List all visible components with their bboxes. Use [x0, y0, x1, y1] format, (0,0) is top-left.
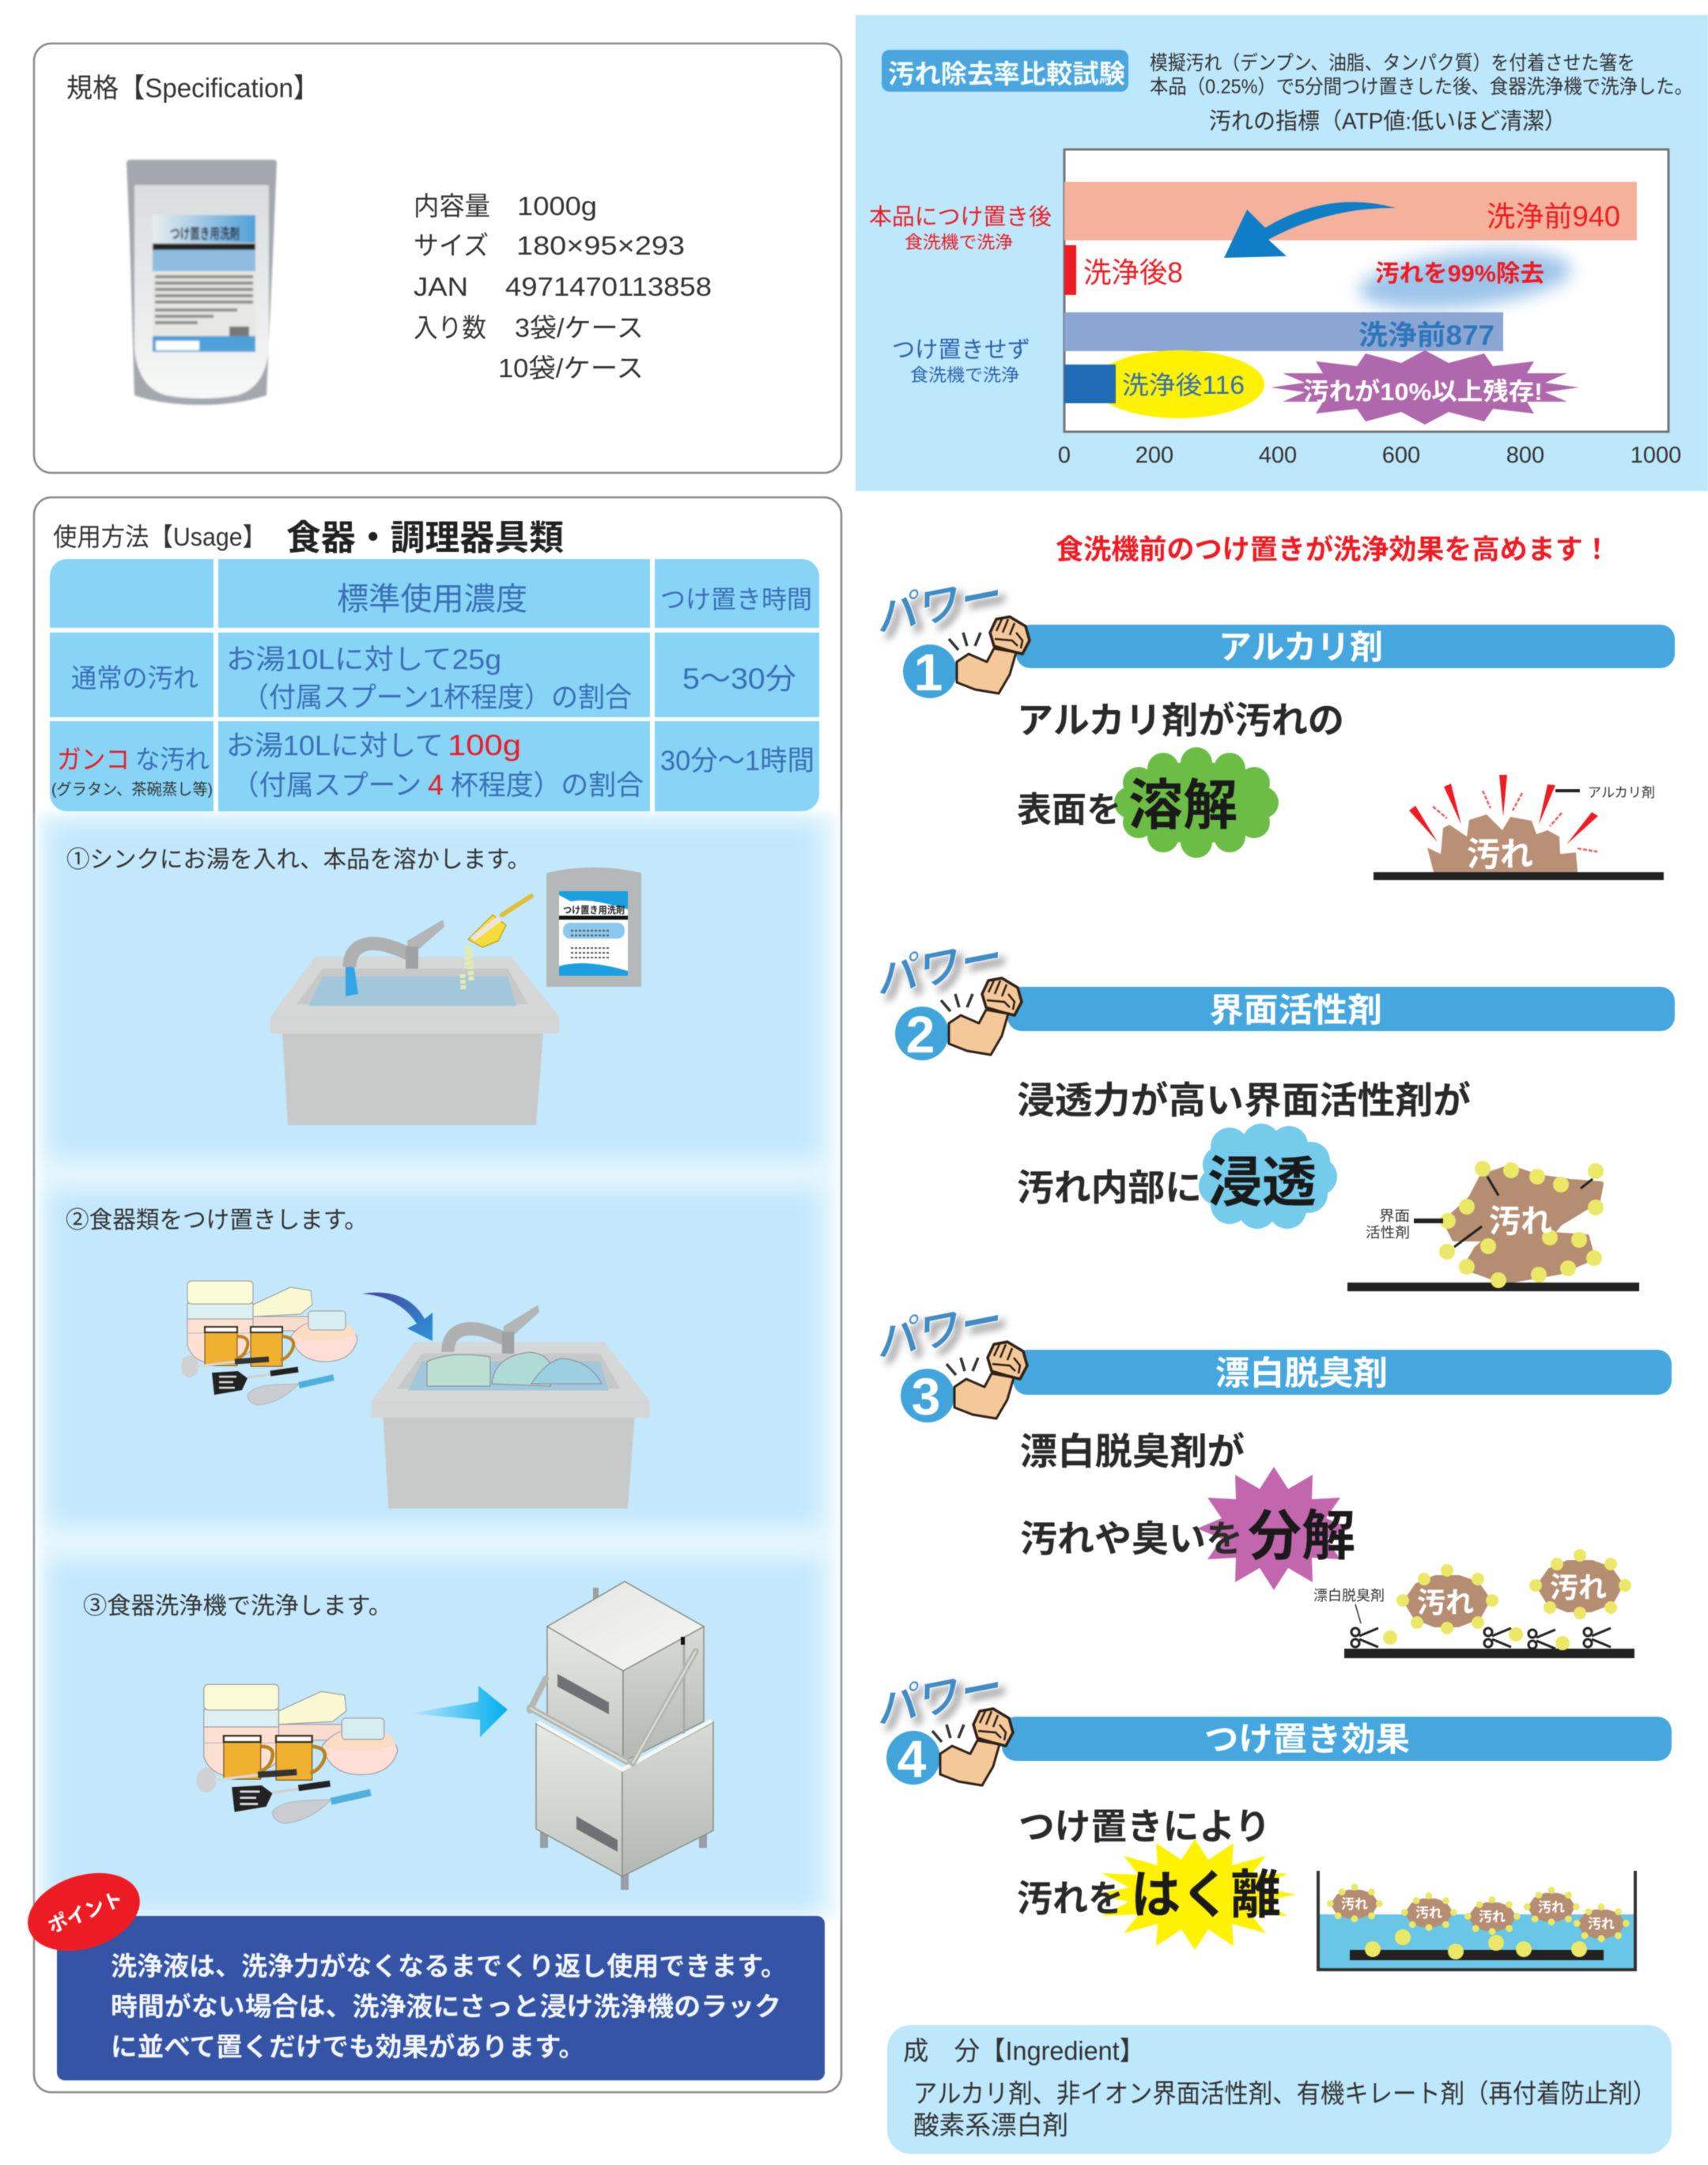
diagram: alkali attacks dirt: 汚れ: [1467, 836, 1533, 873]
badge: number 2: [895, 1005, 949, 1064]
icon: yellow scoop: [468, 896, 531, 947]
badge: point: [17, 1860, 150, 1964]
diagram: surfactant penetrates dirt: [1347, 1161, 1639, 1291]
bar: soaked after wash 8: [1064, 245, 1183, 295]
label: power: パワー: [878, 1294, 1003, 1367]
diagram: bleach breaks down dirt: [1313, 1549, 1634, 1658]
axis label: soaked: 本品につけ置き後: [869, 204, 1052, 230]
chart title: 汚れの指標（ATP値:低いほど清潔）: [1209, 108, 1566, 134]
step 3: wash in dishwasher: [83, 1581, 713, 1890]
heading: usage: 使用方法【Usage】: [53, 523, 266, 551]
text: specification details: 入り数: [414, 313, 486, 342]
text: specification details: 内容量: [414, 191, 490, 221]
diagram: dirt lifted off in tank: 汚れ: [1479, 1910, 1506, 1925]
table: concentration and soak time: （付属スプーン: [232, 770, 421, 801]
bar: not soaked before wash 877: 洗浄前877: [1358, 320, 1494, 351]
heading chip: comparison test: [882, 50, 1128, 92]
callout: point note: [57, 1916, 825, 2080]
icon: sink with dishes: [372, 1305, 650, 1509]
text: step 3: ③食器洗浄機で洗浄します。: [83, 1593, 392, 1619]
text: specification details: サイズ: [414, 231, 489, 260]
callout: decompose: 分解: [1248, 1506, 1355, 1566]
badge: number 3: [901, 1367, 954, 1426]
banner: soaking effect: つけ置き効果: [1204, 1721, 1410, 1758]
bar: soaked after wash 8: 洗浄後8: [1083, 256, 1183, 289]
icon: product package: つけ置き用洗剤: [563, 904, 625, 916]
callout: over 10 percent remains: [1271, 350, 1579, 425]
diagram: surfactant penetrates dirt: 界面: [1379, 1208, 1410, 1224]
bar: not soaked after wash 116: [1064, 350, 1264, 418]
badge: point: ポイント: [45, 1887, 127, 1938]
section: power 3 bleach: [878, 1294, 1672, 1658]
bar: not soaked after wash 116: 洗浄後116: [1122, 371, 1245, 399]
icon: product package: [546, 867, 641, 987]
banner: alkali agent: [1016, 625, 1675, 668]
text: specification details: JAN: [414, 272, 468, 301]
text: test description: [1150, 52, 1693, 98]
x axis values: 200: [1136, 443, 1173, 468]
heading: tableware and cooking utensils: 食器・調理器具類: [286, 519, 564, 557]
table: concentration and soak time: 4: [428, 769, 444, 801]
diagram: alkali attacks dirt: アルカリ剤: [1588, 785, 1655, 800]
axis label: not soaked: つけ置きせず: [892, 338, 1030, 363]
diagram: bleach breaks down dirt: 汚れ: [1550, 1571, 1607, 1604]
arrow: to dishwasher: [409, 1686, 508, 1737]
bar chart: ATP values: [1064, 149, 1668, 432]
icon: product bag photo: つけ置き用洗剤: [170, 226, 240, 242]
callout: 99 percent removed: 汚れを99%除去: [1375, 261, 1544, 287]
heading: ingredients: 成 分【Ingredient】: [903, 2036, 1145, 2065]
table: concentration and soak time: な汚れ: [135, 745, 210, 774]
panel: removal rate comparison test: [856, 15, 1708, 491]
badge: number 2: 2: [906, 1005, 935, 1064]
banner: soaking effect: [1002, 1717, 1672, 1761]
text: specification details: 1000g: [517, 191, 597, 221]
table: concentration and soak time: [50, 559, 819, 811]
text: step 1: ①シンクにお湯を入れ、本品を溶かします。: [66, 847, 531, 873]
bar: soaked before wash 940: 洗浄前940: [1487, 200, 1620, 232]
panel: specification: [34, 43, 841, 473]
badge: number 4: 4: [897, 1729, 927, 1788]
headline: soaking improves washing: 食洗機前のつけ置きが洗浄効果を高めます！: [1056, 535, 1611, 565]
text: specification details: [414, 191, 712, 383]
banner: alkali agent: アルカリ剤: [1219, 629, 1383, 666]
axis label: soaked: [869, 204, 1052, 252]
label: power: パワー: [878, 1661, 1003, 1734]
icon: product bag photo: [127, 160, 277, 405]
table: concentration and soak time: お湯10Lに対して: [226, 731, 444, 761]
arrow: dishes into sink: [362, 1293, 433, 1341]
x axis values: 400: [1259, 443, 1297, 468]
icon: flexing arm: [932, 1709, 1013, 1785]
axis label: not soaked: 食洗機で洗浄: [910, 365, 1019, 385]
icon: flexing arm: [941, 978, 1022, 1055]
callout: point note: 洗浄液は、洗浄力がなくなるまでくり返し使用できます。: [111, 1952, 787, 1981]
callout: decompose: 汚れや臭いを: [1020, 1518, 1243, 1559]
callout: peel off: はく離: [1131, 1865, 1281, 1924]
icon: dishes: [197, 1684, 398, 1823]
label: power: パワー: [878, 931, 1003, 1004]
text: specification details: 3袋/ケース: [515, 313, 644, 342]
diagram: dirt lifted off in tank: 汚れ: [1538, 1900, 1565, 1915]
callout: penetrate: 浸透: [1207, 1152, 1317, 1213]
callout: penetrate: 汚れ内部に: [1017, 1167, 1202, 1208]
text: test description: 模擬汚れ（デンプン、油脂、タンパク質）を付着させた箸を: [1150, 52, 1635, 74]
diagram: bleach breaks down dirt: 汚れ: [1417, 1586, 1474, 1619]
banner: surfactant: [1007, 987, 1675, 1031]
diagram: dirt lifted off in tank: 汚れ: [1341, 1897, 1368, 1912]
arrow: reduction: [1224, 202, 1396, 258]
x axis values: 1000: [1631, 443, 1681, 468]
diagram: bleach breaks down dirt: 漂白脱臭剤: [1313, 1588, 1385, 1604]
banner: bleach deodorant: 漂白脱臭剤: [1215, 1355, 1388, 1392]
table: concentration and soak time: 30分～1時間: [660, 746, 814, 776]
step 1: dissolve product in hot water: [66, 847, 641, 1125]
table: concentration and soak time: つけ置き時間: [660, 585, 812, 614]
heading: specification: 規格【Specification】: [66, 74, 319, 104]
panel: usage: [17, 497, 841, 2092]
callout: decompose: [1020, 1467, 1355, 1590]
icon: sink with water: [270, 920, 559, 1125]
heading chip: comparison test: 汚れ除去率比較試験: [888, 59, 1125, 89]
diagram: surfactant penetrates dirt: 汚れ: [1489, 1204, 1552, 1239]
section: power 1 alkali: [878, 569, 1675, 880]
callout: dissolve: 表面を: [1017, 791, 1121, 829]
table: concentration and soak time: 標準使用濃度: [337, 582, 527, 617]
x axis values: 800: [1506, 443, 1544, 468]
x axis values: [1058, 443, 1681, 468]
x axis values: 600: [1382, 443, 1420, 468]
diagram: dirt lifted off in tank: 汚れ: [1588, 1917, 1615, 1932]
icon: dishes: [181, 1281, 357, 1405]
table: concentration and soak time: (グラタン、茶碗蒸し等): [51, 780, 213, 799]
text: step 2: ②食器類をつけ置きします。: [66, 1207, 368, 1234]
callout: dissolve: [1017, 747, 1279, 858]
badge: number 1: 1: [914, 643, 943, 701]
diagram: alkali attacks dirt: [1374, 775, 1664, 880]
callout: point note: 時間がない場合は、洗浄液にさっと浸け洗浄機のラック: [111, 1992, 781, 2021]
table: concentration and soak time: ガンコ: [57, 745, 130, 774]
section: power 4 soaking effect: [878, 1661, 1672, 1970]
diagram: dirt lifted off in tank: [1318, 1871, 1635, 1970]
badge: number 4: [886, 1729, 940, 1788]
label: power: パワー: [878, 569, 1003, 642]
diagram: dirt lifted off in tank: 汚れ: [1415, 1906, 1442, 1921]
table: concentration and soak time: 5～30分: [682, 663, 796, 695]
icon: flexing arm: [949, 617, 1030, 693]
bar: not soaked before wash 877: [1064, 312, 1503, 351]
icon: dishwasher: [530, 1581, 713, 1890]
diagram: surfactant penetrates dirt: 活性剤: [1366, 1225, 1410, 1241]
text: specification details: 180×95×293: [516, 231, 685, 260]
axis label: not soaked: [892, 338, 1030, 385]
panel: ingredients: [887, 2025, 1672, 2154]
callout: 99 percent removed: [1356, 242, 1574, 318]
text: specification details: 10袋/ケース: [498, 353, 644, 383]
callout: penetrate: [1017, 1124, 1337, 1229]
text: soaking description: つけ置きにより: [1018, 1806, 1271, 1847]
callout: over 10 percent remains: 汚れが10%以上残存!: [1303, 378, 1543, 406]
text: specification details: 4971470113858: [505, 272, 712, 301]
callout: dissolve: 溶解: [1128, 775, 1238, 836]
badge: number 1: [903, 643, 957, 701]
bar: soaked before wash 940: [1064, 182, 1637, 240]
x axis values: 0: [1058, 443, 1071, 468]
text: surfactant description: 浸透力が高い界面活性剤が: [1017, 1079, 1471, 1121]
section: power 2 surfactant: [878, 931, 1675, 1291]
table: concentration and soak time: 杯程度）の割合: [451, 770, 644, 801]
callout: point note: に並べて置くだけでも効果があります。: [111, 2032, 585, 2061]
text: alkali description: アルカリ剤が汚れの: [1017, 700, 1344, 741]
banner: surfactant: 界面活性剤: [1209, 992, 1382, 1029]
callout: peel off: 汚れを: [1017, 1878, 1124, 1919]
table: concentration and soak time: お湯10Lに対して25g: [226, 644, 501, 675]
text: ingredient list: アルカリ剤、非イオン界面活性剤、有機キレート剤（再付着防止剤）: [913, 2079, 1657, 2108]
table: concentration and soak time: 通常の汚れ: [71, 663, 198, 693]
icon: flexing arm: [947, 1342, 1027, 1419]
callout: peel off: [1017, 1839, 1296, 1950]
badge: number 3: 3: [912, 1367, 940, 1426]
table: concentration and soak time: （付属スプーン1杯程度）の割合: [242, 682, 632, 713]
text: ingredient list: 酸素系漂白剤: [913, 2110, 1068, 2140]
text: ingredient list: [913, 2079, 1657, 2140]
step 2: soak dishes: [66, 1207, 650, 1509]
table: concentration and soak time: 100g: [448, 729, 521, 761]
text: bleach description: 漂白脱臭剤が: [1020, 1430, 1245, 1472]
axis label: soaked: 食洗機で洗浄: [905, 232, 1013, 252]
banner: bleach deodorant: [1013, 1350, 1672, 1395]
